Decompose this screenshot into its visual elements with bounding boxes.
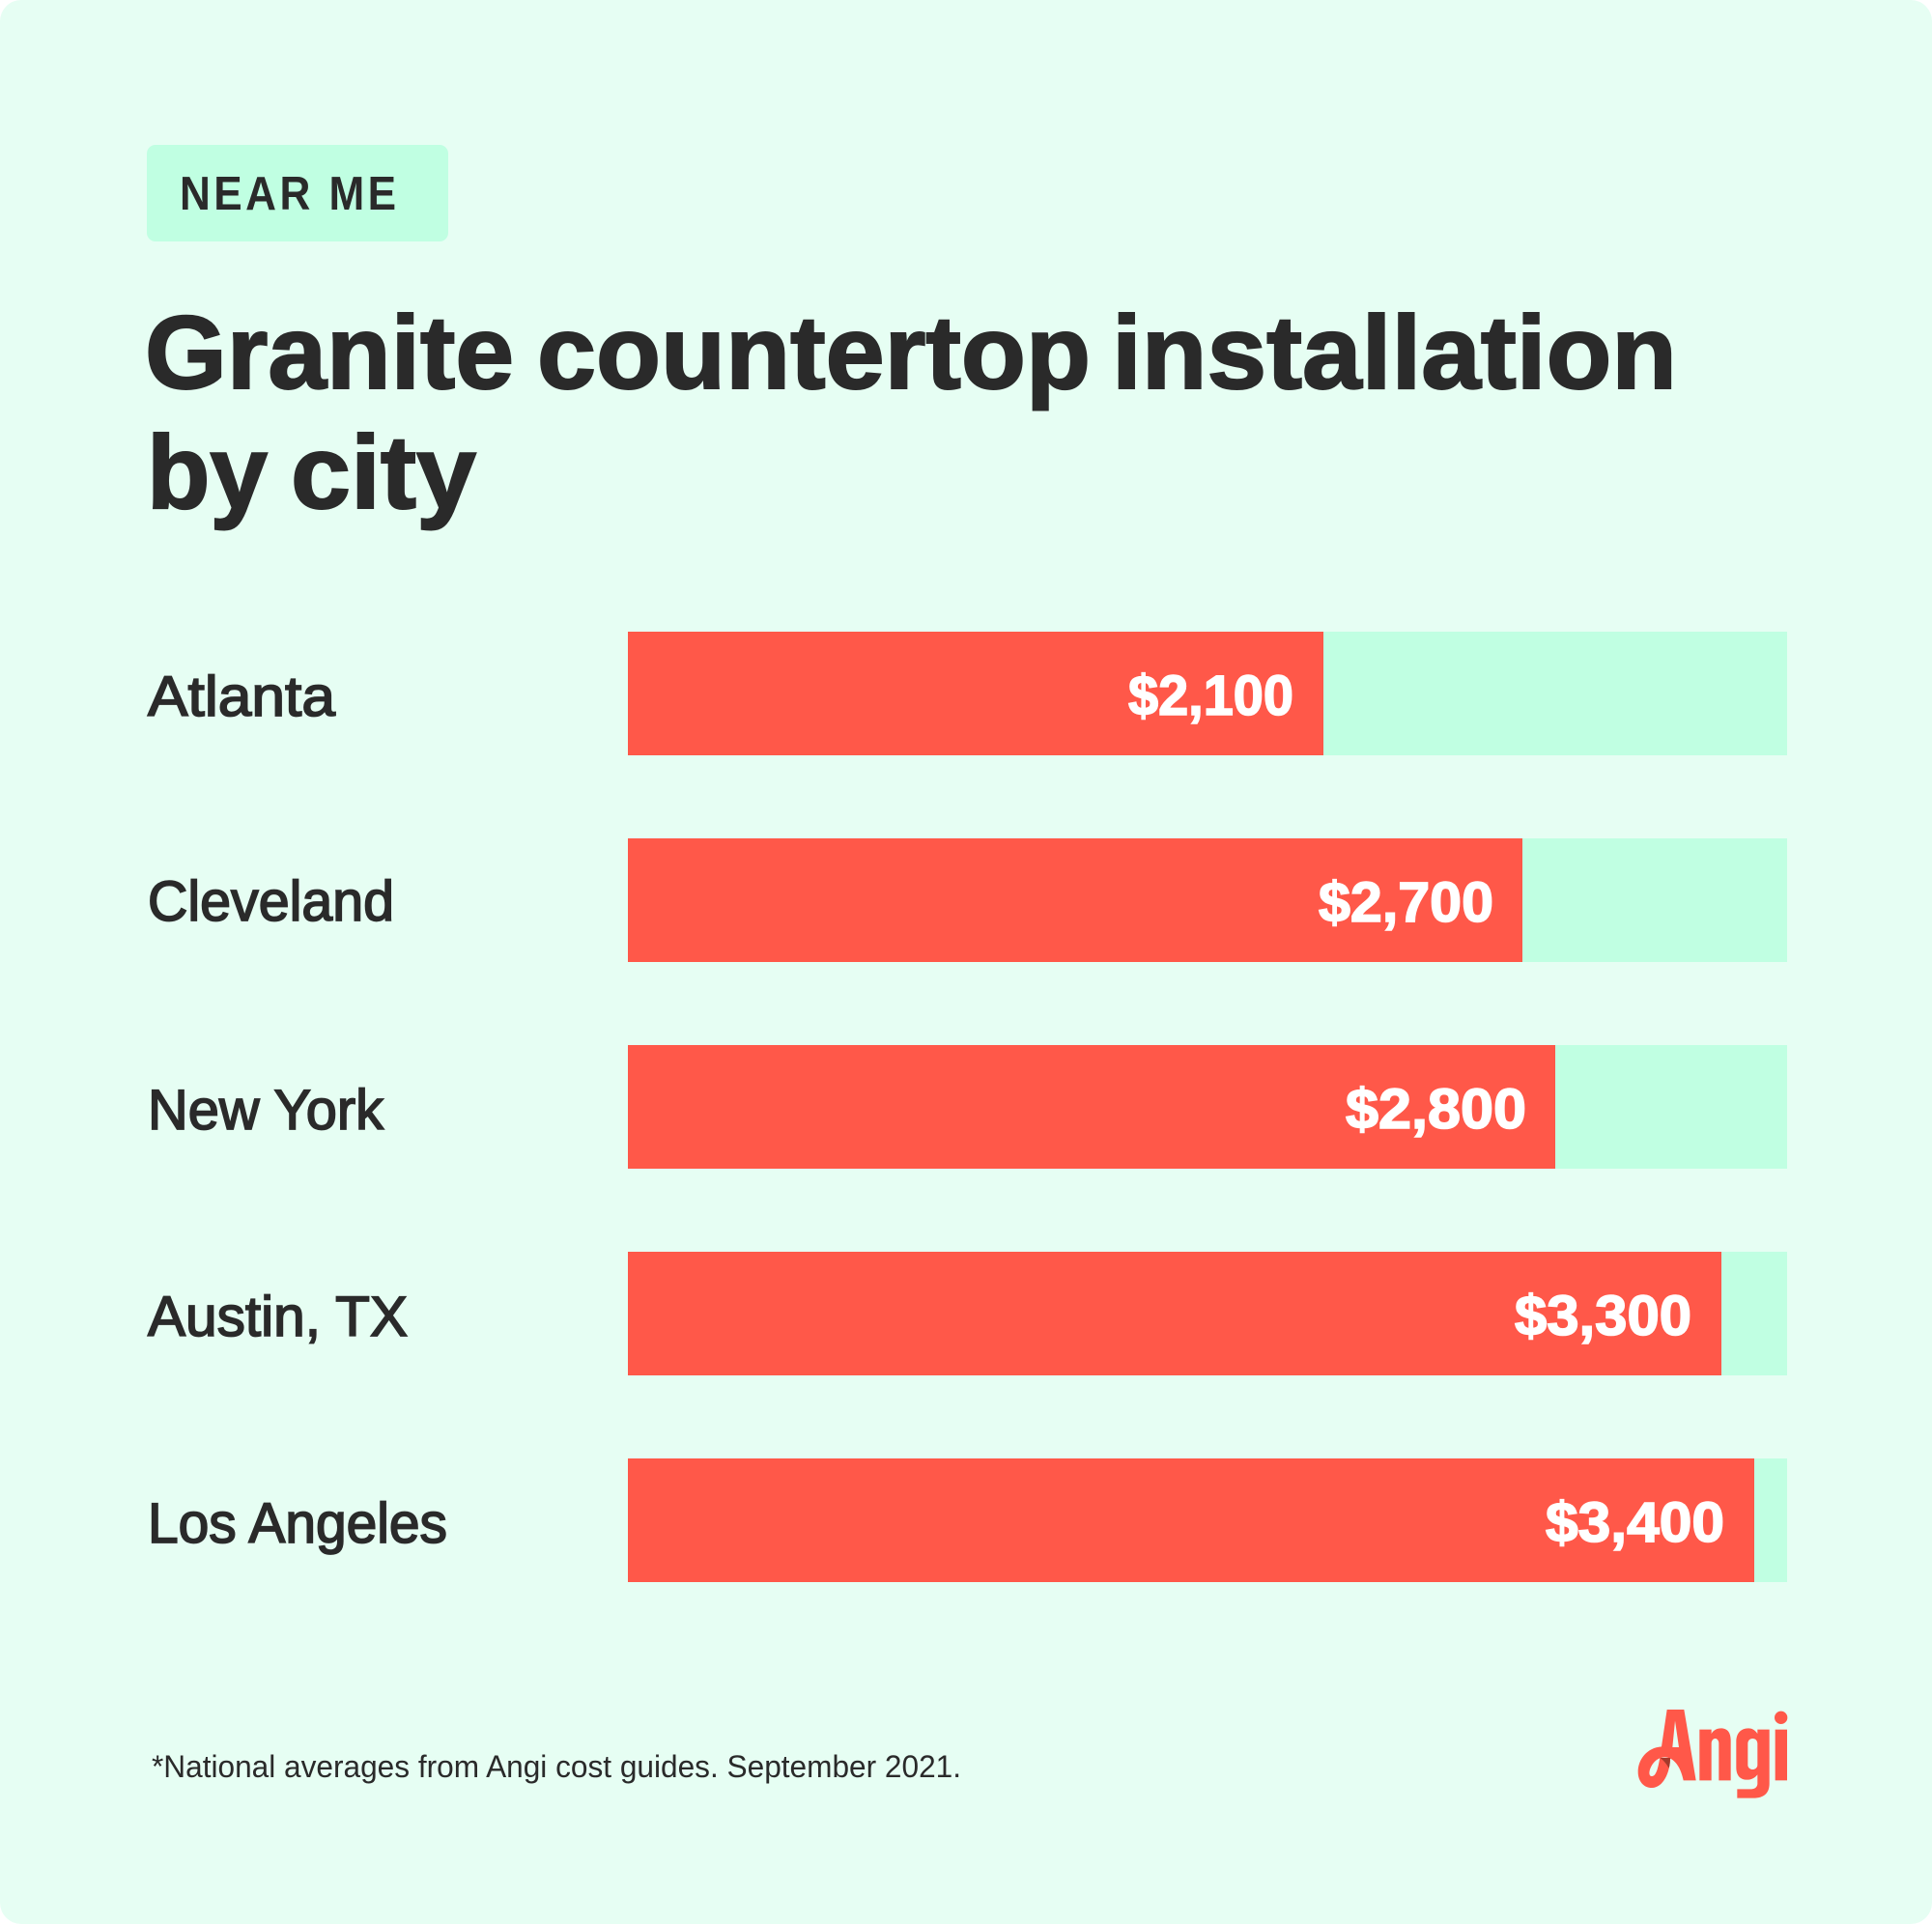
bar chart (148, 632, 1787, 1582)
title: countertop (537, 294, 1091, 410)
tag: near me: NEAR ME (180, 167, 396, 220)
title (145, 294, 1677, 530)
row: Los Angeles: $3,400 (1546, 1491, 1724, 1554)
row: New York: New York (148, 1079, 384, 1142)
footnote: *National averages from Angi cost guides. September 2021. (152, 1749, 961, 1784)
tag: near me (147, 145, 448, 241)
row: Austin, TX: Austin, TX (148, 1286, 408, 1348)
title: city (291, 413, 476, 530)
title: by (147, 413, 268, 530)
row: Atlanta (148, 632, 1787, 755)
title: installation (1112, 294, 1677, 410)
logo: Angi (1638, 1710, 1787, 1798)
row: Atlanta: Atlanta (148, 665, 336, 728)
row: New York: $2,800 (1346, 1078, 1526, 1141)
row: Austin, TX: $3,300 (1515, 1285, 1691, 1347)
row: Los Angeles: Los Angeles (148, 1492, 447, 1555)
row: Cleveland: Cleveland (148, 870, 394, 933)
title: Granite (145, 294, 514, 410)
row: New York (148, 1045, 1787, 1169)
row: Los Angeles (148, 1458, 1787, 1582)
row: Cleveland (148, 838, 1787, 962)
row: Austin, TX (148, 1252, 1787, 1375)
row: Atlanta: $2,100 (1128, 665, 1293, 727)
row: Cleveland: $2,700 (1319, 871, 1493, 934)
